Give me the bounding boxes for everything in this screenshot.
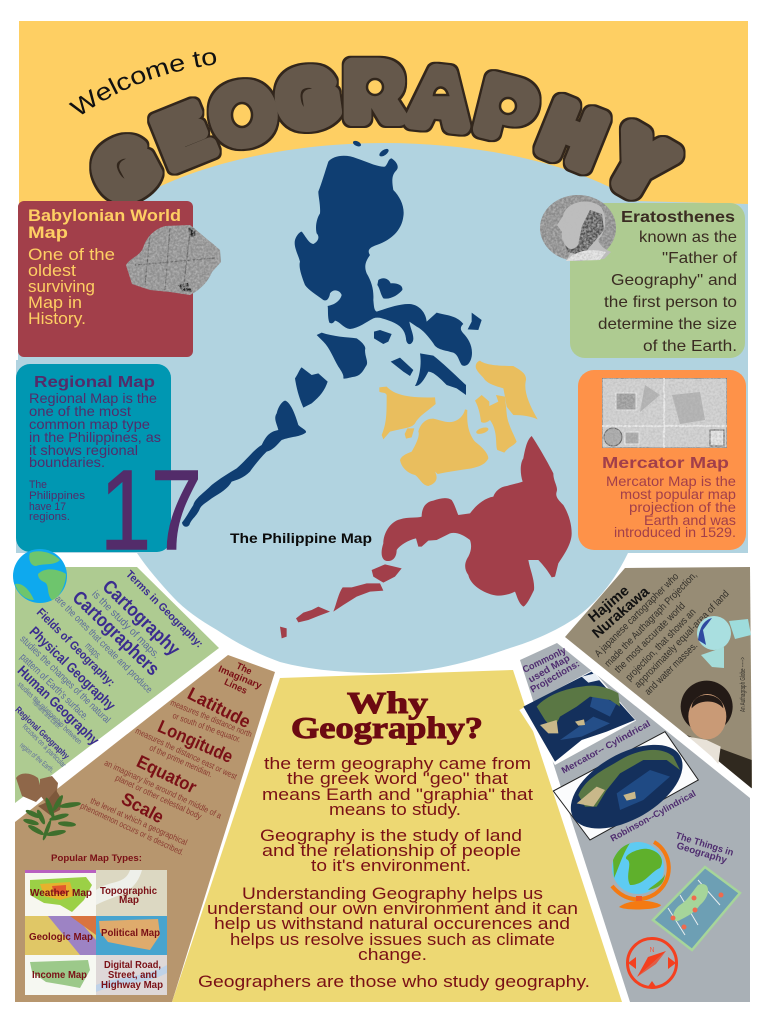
body: the first person to: [604, 294, 737, 311]
GEOGRAPHY arched wordmark: H: [532, 86, 613, 183]
thumbnail grid: [25, 870, 167, 995]
regions note: The: [29, 479, 47, 491]
panel: Babylonian World Map: [18, 201, 221, 357]
body: [606, 473, 736, 540]
terms list: Physical Geography: [27, 623, 119, 713]
panel body: Regional Map is the: [29, 390, 157, 406]
panel: Why Geography: [172, 670, 622, 1002]
thumbnail labels: Political Map: [101, 928, 160, 939]
thumbnail labels: Map: [119, 895, 139, 906]
GEOGRAPHY arched wordmark: Y: [597, 116, 682, 212]
body: "Father of: [662, 250, 738, 267]
paragraph: origin of the word: [262, 755, 533, 819]
Visayas region: [379, 361, 538, 486]
paragraph: definition: and the relationship of people: [262, 842, 521, 860]
panel body: surviving: [28, 277, 95, 296]
terms list: Longitude: [155, 716, 236, 767]
paragraph: why it helps: [207, 885, 578, 964]
projections heading: used Map: [527, 653, 572, 685]
globe caption: An Authagraph Globe ----->: [740, 657, 747, 712]
Luzon region: [182, 140, 482, 527]
photo of Hajime Nurakawa: [681, 681, 752, 788]
panel body: One of the: [28, 245, 115, 264]
thumbnail labels: Digital Road,: [104, 960, 161, 971]
body: determine the size: [598, 316, 737, 333]
letter counters: [232, 79, 516, 127]
terms list: Human Geography: [15, 662, 103, 748]
projections heading: Commonly: [521, 645, 569, 676]
biography: made the Authagraph Projection,: [603, 570, 700, 670]
thumbnail labels: Geologic Map: [29, 932, 93, 943]
section heading: Imaginary: [217, 664, 264, 692]
panel body: [29, 390, 161, 470]
terms list: maps.: [82, 641, 104, 662]
Mindanao region: [280, 436, 572, 638]
panel heading: Regional Map: [34, 374, 155, 391]
terms list: Equator: [133, 751, 200, 797]
body: introduced in 1529.: [614, 524, 736, 540]
icon: authagraph globe: [697, 616, 751, 668]
icon: compass: N: [649, 947, 655, 954]
things heading: Geography: [675, 841, 729, 866]
paragraph: origin of the word: the term geography came from: [264, 755, 531, 773]
terms list: are the ones that create and produce: [52, 594, 154, 696]
caption: Mercator: Mercator-- Cylindrical: [560, 718, 652, 776]
popular map types: [25, 853, 167, 995]
panel heading: Babylonian World: [28, 206, 181, 225]
panel heading: [28, 206, 181, 242]
big number 17: 17: [100, 447, 202, 573]
body: Mercator Map is the: [606, 473, 736, 489]
paragraph: why it helps: help us withstand natural occurences and: [214, 915, 570, 933]
terms list: studies the changes of the natural: [17, 634, 112, 726]
paragraph: definition: [260, 827, 522, 875]
terms list: Regional Geography: [13, 705, 71, 761]
map caption: The Philippine Map: [230, 530, 372, 546]
welcome line: Welcome to: [68, 52, 216, 114]
map: Mercator projection: [519, 670, 636, 765]
regions note: [29, 479, 86, 523]
things heading: The Things in: [674, 831, 735, 859]
biography: approximately equal-area of land: [633, 589, 732, 691]
paragraph: definition: to it's environment.: [311, 857, 471, 875]
terms list: or south of the equator.: [171, 710, 242, 744]
paragraph: definition: Geography is the study of land: [260, 827, 522, 845]
paragraph: geographers: Geographers are those who study geography.: [198, 973, 590, 991]
projections heading: [521, 645, 582, 695]
heading: Geography?: [291, 710, 483, 745]
name: Eratosthenes: [621, 209, 735, 226]
thumbnail labels: Income Map: [32, 970, 87, 981]
thumbnail labels: [29, 886, 163, 991]
philippine map: [182, 140, 572, 638]
panel: Hajime Nurakawa: [565, 567, 752, 788]
panel: Eratosthenes: [540, 195, 745, 358]
panel body: [28, 245, 115, 328]
terms list: is the study of maps.: [89, 588, 162, 661]
regions note: Philippines: [29, 490, 86, 502]
GEOGRAPHY arched wordmark: G: [81, 119, 170, 219]
terms list: humans and Earth.: [31, 698, 63, 730]
globe background: [16, 143, 748, 673]
panel body: Map in: [28, 293, 82, 312]
paragraph: origin of the word: means to study.: [329, 801, 461, 819]
icon: compass: [628, 938, 676, 988]
thumbnail labels: Street, and: [108, 970, 157, 981]
panel body: it shows regional: [29, 442, 138, 458]
title: Welcome to Geography: [68, 51, 686, 219]
paragraph: why it helps: Understanding Geography helps us: [242, 885, 543, 903]
GEOGRAPHY arched wordmark: E: [145, 88, 222, 184]
biography: [593, 570, 732, 698]
terms list: pattern of Earth's surface.: [17, 652, 91, 723]
regions note: regions.: [29, 511, 70, 523]
terms list: Fields of Geography:: [34, 605, 118, 689]
section heading: The: [234, 661, 253, 677]
terms list: [79, 683, 254, 857]
GEOGRAPHY arched wordmark: P: [473, 63, 541, 155]
terms list: Scale: [118, 788, 167, 827]
map: Robinson projection: [553, 728, 698, 846]
terms list: planet or other celestial body: [114, 772, 204, 822]
icon: desk globe: [612, 842, 669, 909]
terms list: [13, 568, 205, 775]
terms list: phenomenon occurs or is described.: [79, 800, 186, 857]
panel body: common map type: [29, 416, 150, 432]
biography: A japanese cartographer who: [593, 571, 681, 660]
caption: Robinson: Robinson--Cylindrical: [609, 788, 697, 844]
biography: the most accurate world: [613, 601, 688, 676]
panel: The Imaginary Lines: [15, 655, 275, 1002]
GEOGRAPHY arched wordmark: G: [274, 53, 342, 143]
GEOGRAPHY arched wordmark: [81, 51, 682, 219]
body: [598, 229, 738, 355]
heading: Why: [347, 685, 429, 720]
terms list: Cartography: [98, 576, 184, 660]
terms list: Terms in Geography:: [123, 568, 205, 650]
paragraph: origin of the word: the greek word "geo" that: [287, 770, 508, 788]
body: known as the: [639, 229, 737, 246]
panel: Mercator Map: [578, 370, 746, 550]
header background: [19, 21, 748, 211]
body: of the Earth.: [643, 338, 737, 355]
terms list: region of the Earth.: [18, 741, 56, 775]
thumbnail labels: Topographic: [100, 886, 157, 897]
GEOGRAPHY arched wordmark: R: [347, 51, 401, 134]
thumbnail labels: Highway Map: [101, 980, 163, 991]
portrait of Eratosthenes: [540, 195, 616, 261]
name: Hajime: [586, 583, 633, 626]
heading: Mercator Map: [602, 455, 729, 472]
name: Nurakawa: [589, 583, 653, 642]
popular map types: Popular Map Types:: [51, 853, 142, 864]
icon: folded map: [653, 867, 740, 950]
old map image: [602, 378, 727, 448]
icon: clay tablet map: [126, 225, 221, 295]
terms list: an imaginary line around the middle of a: [103, 757, 223, 821]
body: Geography" and: [611, 272, 737, 289]
panel body: one of the most: [29, 403, 131, 419]
paragraph: why it helps: change.: [358, 946, 427, 964]
projections heading: Projections:: [529, 658, 582, 695]
panel body: boundaries.: [29, 454, 105, 470]
paragraph: why it helps: helps us resolve issues such as climate: [230, 931, 555, 949]
terms list: Latitude: [184, 683, 254, 732]
icon: rocks and plant: [16, 774, 81, 841]
body: Earth and was: [644, 512, 736, 528]
terms list: Cartographers: [68, 587, 163, 680]
panel heading: Map: [28, 223, 68, 242]
regions note: have 17: [29, 501, 66, 513]
biography: and water masses.: [643, 640, 700, 698]
heading: [291, 685, 483, 745]
panel body: oldest: [28, 261, 76, 280]
paragraph: why it helps: understand our own environment and it can: [207, 900, 578, 918]
terms list: of the prime meridian.: [148, 742, 214, 779]
body: projection of the: [629, 499, 736, 515]
panel: Regional Map: [16, 364, 202, 573]
panel body: History.: [28, 309, 86, 328]
section heading: Lines: [222, 677, 249, 697]
paragraph: origin of the word: means Earth and "graphia" that: [262, 786, 533, 804]
GEOGRAPHY arched wordmark: O: [205, 67, 282, 162]
terms list: the level at which a geographical: [89, 795, 189, 847]
terms list: focuses on a particular: [21, 722, 68, 770]
body: most popular map: [620, 486, 736, 502]
GEOGRAPHY arched wordmark: A: [409, 54, 471, 142]
terms list: measures the distance east or west: [134, 725, 239, 782]
terms list: measures the distance north: [169, 697, 254, 739]
panel: Terms in Geography: [13, 549, 219, 803]
biography: projection, that shows an: [624, 607, 698, 684]
thumbnail labels: Weather Map: [30, 888, 92, 899]
icon: earth: [13, 549, 67, 603]
panel: map projections and things in geography: [519, 643, 750, 1002]
panel body: in the Philippines, as: [29, 429, 161, 445]
terms list: studies the relationship between: [16, 680, 84, 746]
